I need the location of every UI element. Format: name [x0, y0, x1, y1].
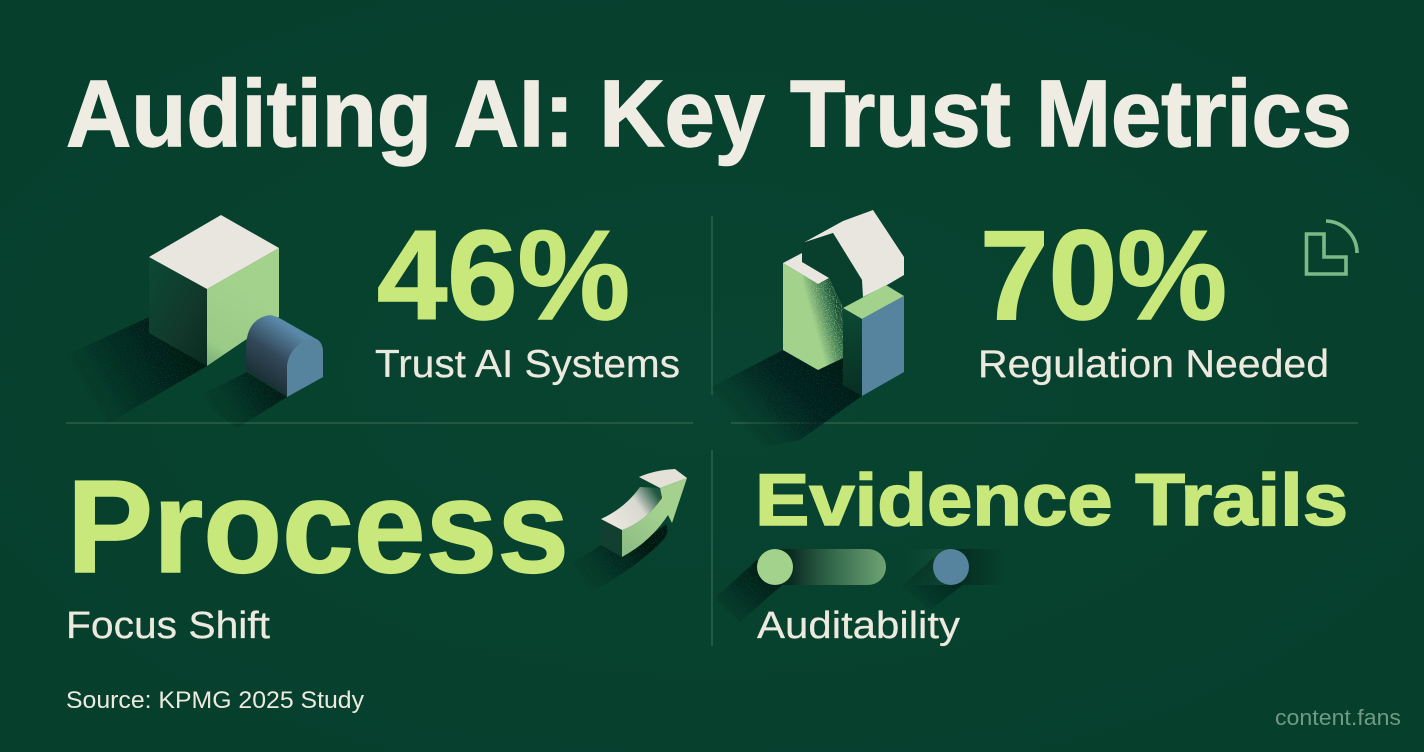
label: Trust AI Systems: Trust AI Systems [375, 343, 680, 386]
horizontal divider left [66, 422, 693, 424]
panel: evidence trails auditability [715, 460, 1348, 647]
panel: 46% trust AI systems [38, 204, 680, 428]
source note: Source: KPMG 2025 Study [66, 687, 364, 714]
icon: curved arrow [573, 469, 687, 593]
stat: Process: Process [67, 453, 569, 600]
title: Auditing AI: Key Trust Metrics [66, 61, 1352, 167]
horizontal divider right [731, 422, 1358, 424]
vertical divider top [711, 216, 713, 395]
heading: Evidence Trails: Evidence Trails [755, 460, 1348, 541]
icon: isometric building [700, 210, 904, 450]
panel: process focus shift [66, 453, 687, 647]
stat: 70%: 70% [980, 204, 1227, 346]
watermark: content.fans [1275, 705, 1401, 730]
label: Regulation Needed: Regulation Needed [978, 343, 1329, 386]
vertical divider bottom [711, 450, 713, 646]
icon: trail track with dots [715, 549, 1005, 622]
label: Focus Shift: Focus Shift [66, 605, 270, 647]
label: Auditability: Auditability [757, 605, 960, 647]
icon: cube and arch [38, 215, 323, 428]
stat: 46%: 46% [377, 204, 630, 346]
panel: 70% regulation needed [700, 204, 1357, 450]
icon: corner outline and arc [1306, 221, 1357, 274]
